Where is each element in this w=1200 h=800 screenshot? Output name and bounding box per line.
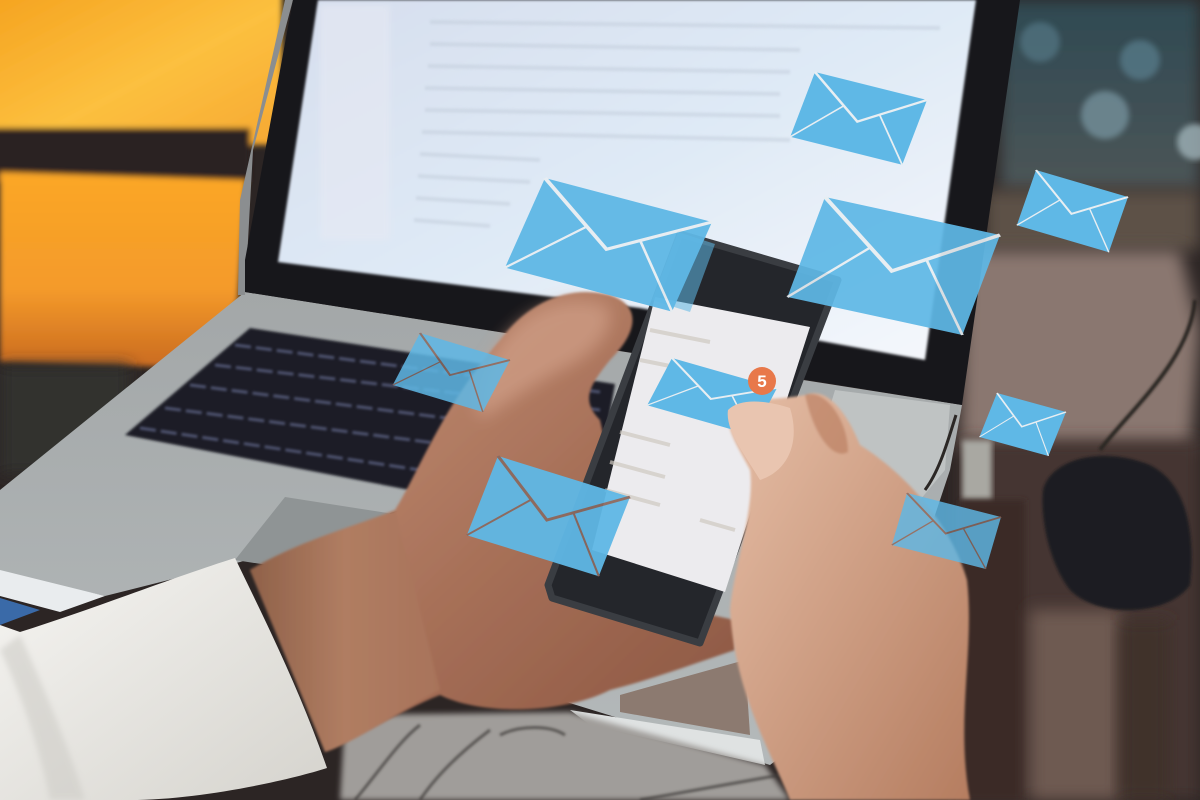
cable by laptop xyxy=(925,415,956,490)
laptop base xyxy=(0,292,962,765)
phone xyxy=(548,232,838,643)
mouse and cable xyxy=(1042,300,1195,610)
trackpad xyxy=(235,497,400,570)
phone glass tint xyxy=(652,232,715,312)
phone screen xyxy=(592,297,810,592)
email list xyxy=(414,22,940,226)
shirt sleeve xyxy=(0,558,327,800)
envelope: lower left over phone xyxy=(467,456,630,576)
left arm and hand xyxy=(250,292,735,752)
envelope: on keyboard xyxy=(393,333,510,412)
right hand fingertip over envelope xyxy=(728,402,794,480)
envelope: large right xyxy=(787,197,1000,335)
keyboard xyxy=(125,328,615,492)
right hand xyxy=(728,393,970,800)
laptop front edge xyxy=(0,570,105,612)
background: right side, bokeh and desk xyxy=(960,0,1200,800)
screen bezel xyxy=(245,0,1020,405)
envelope: small upper right xyxy=(1017,170,1128,252)
envelope: large centre xyxy=(505,178,712,312)
lid silver edge xyxy=(238,0,293,295)
screen xyxy=(278,0,976,360)
envelope: low right xyxy=(892,493,1001,569)
badge: 5 notifications: 5 xyxy=(757,372,767,391)
paper on desk xyxy=(340,712,790,800)
envelope: small right xyxy=(979,393,1066,456)
envelope: phone centre with badge xyxy=(647,358,777,435)
envelope: laptop top right xyxy=(790,72,927,165)
